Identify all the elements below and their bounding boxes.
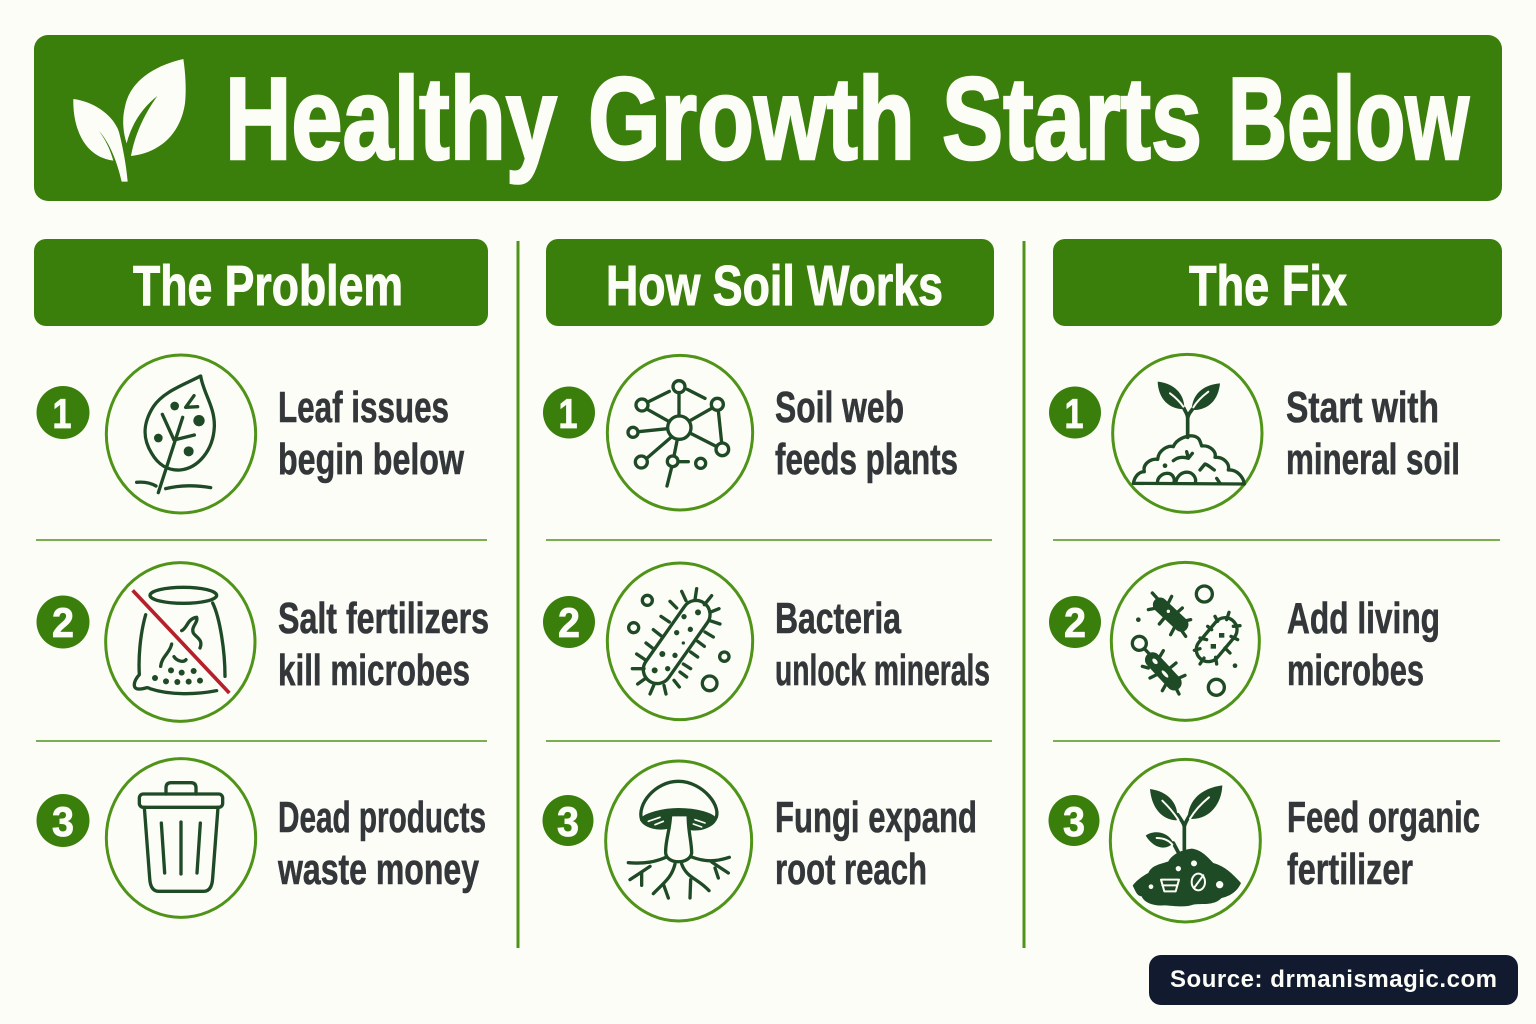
number 1 <box>36 386 90 439</box>
heading: the problem: The Problem <box>133 254 403 318</box>
panel: the problem <box>34 239 489 917</box>
label: Leaf issues <box>278 383 449 432</box>
label: begin below <box>278 435 465 484</box>
label: Add living <box>1287 594 1440 643</box>
number 3 <box>542 795 594 846</box>
number 3: 3 <box>1063 798 1085 845</box>
item: bacteria <box>543 563 990 720</box>
item: soil web <box>543 355 958 510</box>
number 2: 2 <box>558 599 580 646</box>
label: kill microbes <box>278 646 470 695</box>
heading: how soil works: How Soil Works <box>606 254 943 318</box>
label: Salt fertilizers <box>278 594 489 643</box>
item: salt fertilizers <box>36 563 489 721</box>
label: Fungi expand <box>775 793 977 842</box>
number 1 <box>543 386 595 438</box>
title: Starts <box>942 53 1202 184</box>
icon: microbes <box>1111 562 1259 720</box>
heading: the fix <box>1053 239 1502 326</box>
number 2: 2 <box>1064 599 1086 646</box>
label <box>1287 793 1480 894</box>
heading: the fix: The Fix <box>1189 254 1347 318</box>
icon: crossed fertilizer bag <box>106 563 255 721</box>
label <box>1286 383 1460 484</box>
icon: mushroom with roots <box>606 761 752 921</box>
number 2 <box>36 596 90 648</box>
icon: plant growing from organic pile <box>1110 759 1260 922</box>
number 1 <box>1049 386 1101 438</box>
number 3: 3 <box>52 798 74 845</box>
title banner <box>34 35 1502 201</box>
icon: diseased leaf <box>106 355 256 513</box>
item: leaf issues <box>36 355 465 513</box>
item: dead products <box>36 759 486 917</box>
label: unlock minerals <box>775 646 990 695</box>
number 1: 1 <box>1064 390 1084 437</box>
icon: bacterium <box>607 563 753 720</box>
title: Growth <box>588 53 915 184</box>
item: living microbes <box>1049 562 1440 720</box>
number 1: 1 <box>558 390 578 437</box>
column divider left <box>516 241 520 948</box>
item: fungi <box>542 761 977 921</box>
number 1: 1 <box>52 390 72 437</box>
heading: how soil works <box>546 239 994 326</box>
panel: the fix <box>1048 239 1502 922</box>
number 3 <box>1048 795 1100 846</box>
label: Dead products <box>278 793 486 842</box>
number 2: 2 <box>52 599 74 646</box>
label <box>278 383 465 484</box>
number 2 <box>543 596 595 648</box>
label: fertilizer <box>1287 845 1413 894</box>
title: Healthy <box>225 53 557 184</box>
label <box>278 594 489 695</box>
number 2 <box>1049 596 1101 648</box>
column divider right <box>1022 241 1026 948</box>
label <box>775 594 990 695</box>
item: organic fertilizer <box>1048 759 1480 922</box>
label <box>1287 594 1440 695</box>
label <box>775 793 977 894</box>
label: Soil web <box>775 383 904 432</box>
label <box>775 383 958 484</box>
heading: the problem <box>34 239 488 326</box>
number 3: 3 <box>557 798 579 845</box>
label: root reach <box>775 845 927 894</box>
label: Start with <box>1286 383 1439 432</box>
title <box>225 53 1470 184</box>
label: Bacteria <box>775 594 901 643</box>
source badge: Source: drmanismagic.com <box>1170 966 1497 993</box>
panel: how soil works <box>542 239 994 921</box>
label <box>277 793 486 894</box>
source badge <box>1149 955 1518 1005</box>
icon: soil network <box>607 355 753 510</box>
item: mineral soil <box>1049 354 1460 512</box>
number 3 <box>36 794 90 847</box>
label: microbes <box>1287 646 1424 695</box>
label: waste money <box>277 845 479 894</box>
label: mineral soil <box>1286 435 1460 484</box>
label: feeds plants <box>775 435 958 484</box>
icon: sprout on mineral mound <box>1113 354 1262 512</box>
icon: leaf logo <box>73 59 186 182</box>
icon: trash can <box>106 759 256 917</box>
